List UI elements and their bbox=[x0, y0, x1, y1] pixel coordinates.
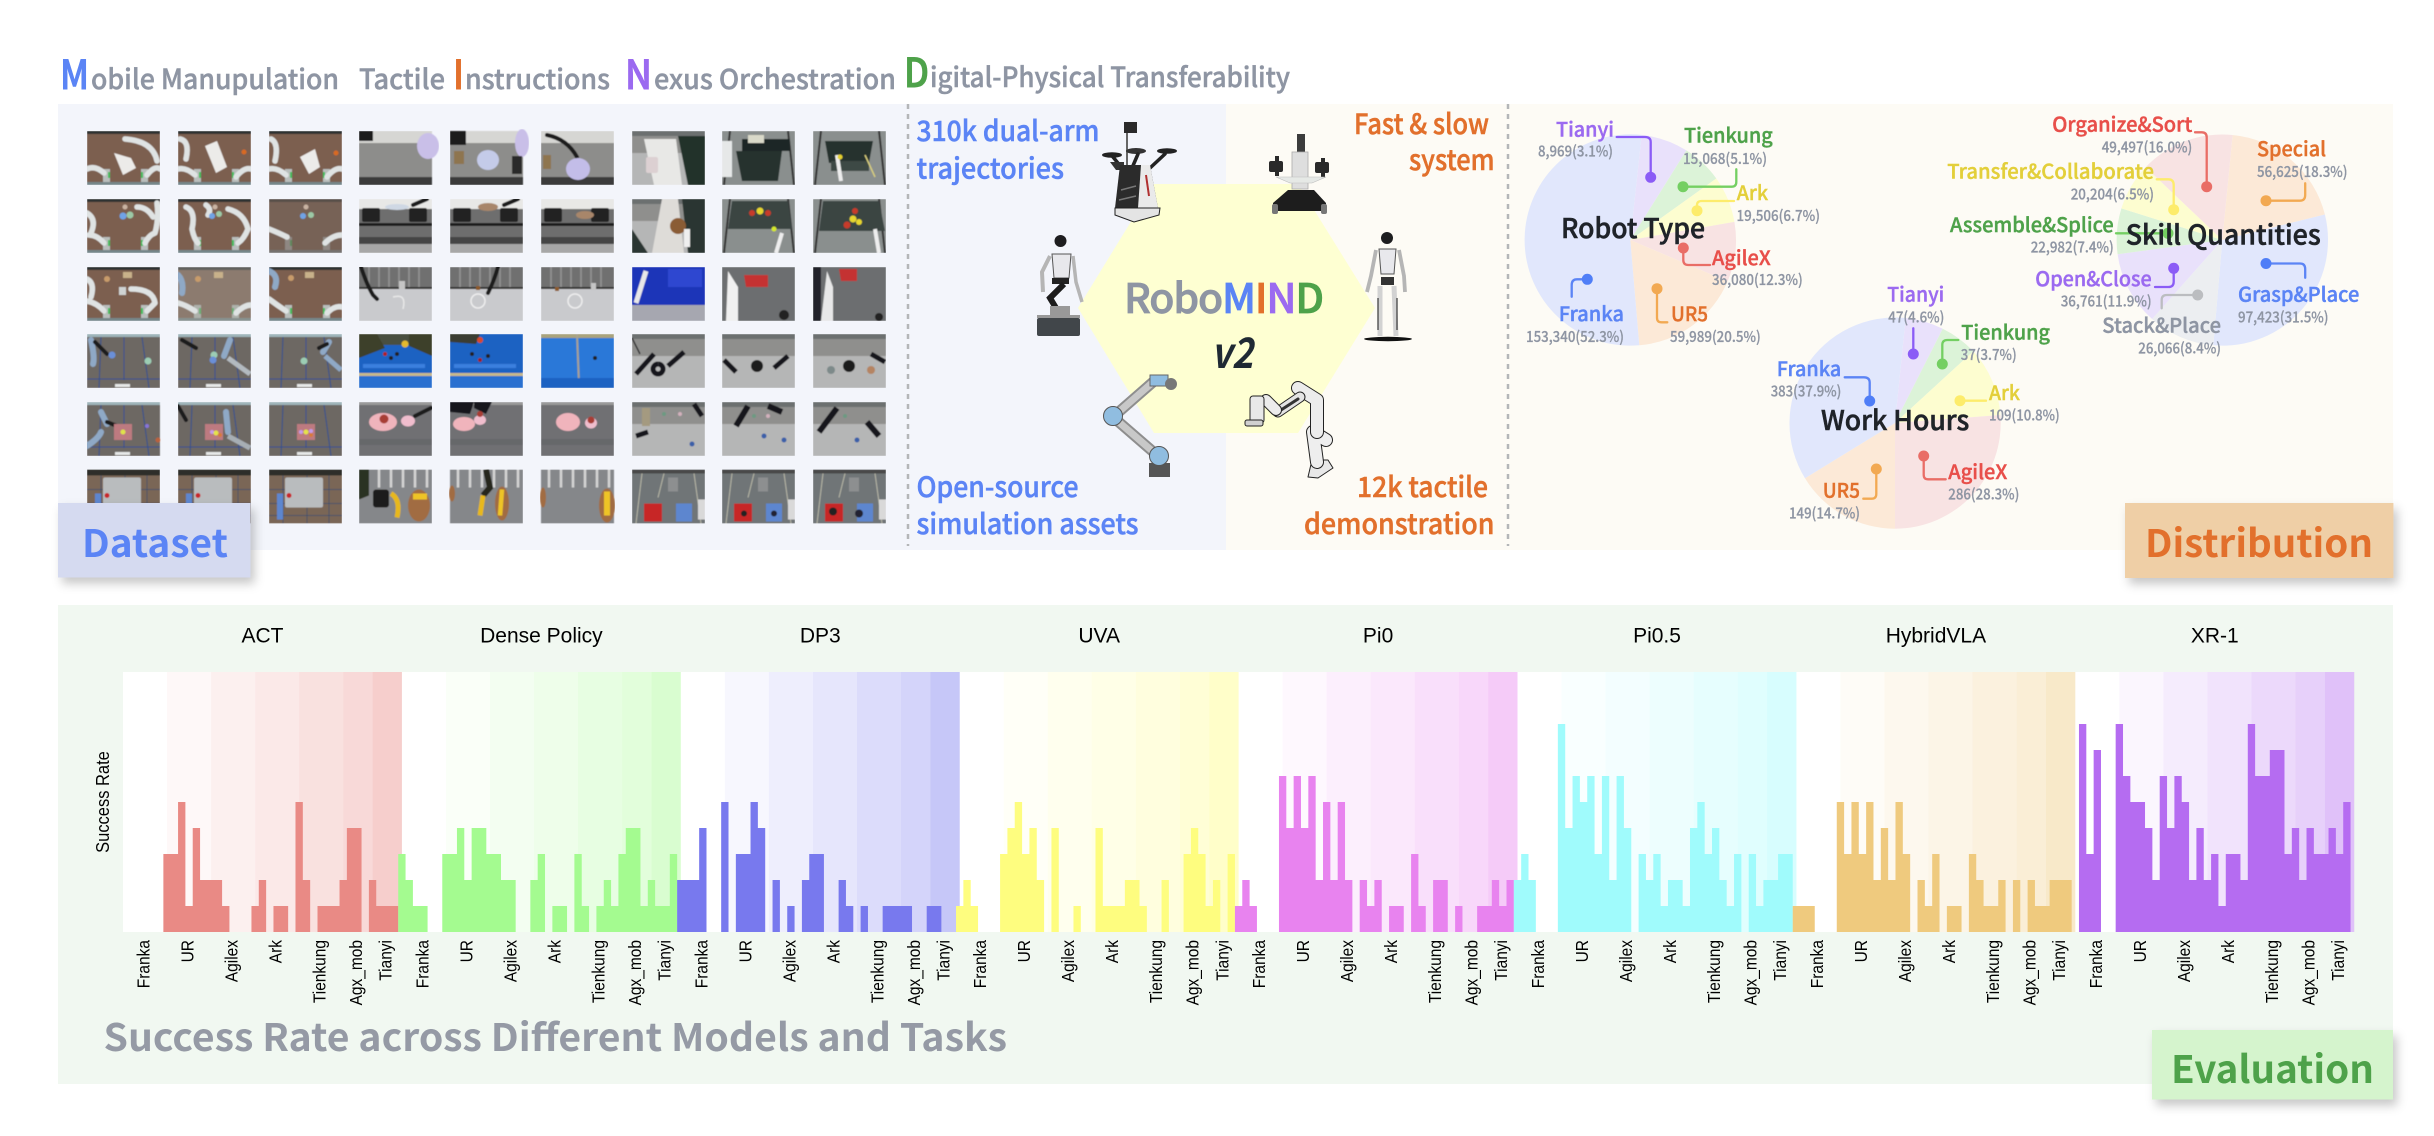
dataset thumbnail row 1 bbox=[87, 129, 886, 185]
model: HybridVLA bbox=[1793, 624, 2075, 1005]
RoboMIND v2 title: RoboMIND bbox=[1124, 265, 1324, 325]
model: Dense Policy: Dense Policy bbox=[480, 624, 603, 648]
label: Distribution: Distribution bbox=[2145, 513, 2373, 568]
pie chart: Robot Type bbox=[1525, 114, 1820, 347]
labels: Skill Quantities: Skill Quantities bbox=[2126, 213, 2321, 252]
model: Pi0.5: Agx_mob bbox=[1740, 940, 1761, 1005]
model: ACT: ACT bbox=[242, 624, 284, 648]
labels: Skill Quantities: Assemble&Splice bbox=[1950, 209, 2114, 238]
panel: evaluation background bbox=[58, 605, 2393, 1084]
side text: Fast & slow system: system bbox=[1409, 139, 1494, 179]
labels: Work Hours: 383(37.9%) bbox=[1771, 381, 1841, 402]
labels: Robot Type bbox=[1526, 114, 1820, 347]
dataset thumbnail row 4 bbox=[87, 334, 886, 388]
dataset thumbnail row 2 bbox=[87, 199, 886, 253]
model: HybridVLA: UR bbox=[1851, 940, 1871, 962]
model: DP3: DP3 bbox=[800, 624, 841, 648]
model: XR-1 bbox=[2079, 624, 2354, 1005]
icon: column mobile robot bbox=[1269, 134, 1329, 214]
page title line: exus Orchestration bbox=[654, 57, 896, 97]
page title line: D bbox=[904, 41, 929, 99]
model: Dense Policy: Tianyi bbox=[654, 940, 675, 981]
labels: Skill Quantities bbox=[1947, 109, 2359, 358]
dataset thumbnail row 6 bbox=[87, 470, 886, 524]
labels: Robot Type: 59,989(20.5%) bbox=[1670, 326, 1761, 347]
axis title: Success Rate: Success Rate bbox=[92, 751, 113, 853]
labels: Robot Type: Ark bbox=[1737, 177, 1769, 206]
labels: Work Hours: 37(3.7%) bbox=[1961, 344, 2017, 365]
icon: standing humanoid bbox=[1364, 232, 1412, 341]
labels: Skill Quantities: 49,497(16.0%) bbox=[2102, 137, 2192, 158]
labels: Skill Quantities: 56,625(18.3%) bbox=[2257, 161, 2348, 182]
model: HybridVLA: Ark bbox=[1939, 939, 1959, 963]
label: Distribution bbox=[2125, 503, 2393, 578]
model: ACT: Tianyi bbox=[376, 940, 396, 981]
labels: Skill Quantities: Open&Close bbox=[2035, 263, 2152, 292]
model: Pi0: Tienkung bbox=[1425, 940, 1445, 1003]
side text: Open-source simulation assets: simulation assets bbox=[916, 503, 1138, 543]
labels: Work Hours: 47(4.6%) bbox=[1888, 306, 1944, 327]
model: XR-1: Tienkung bbox=[2262, 940, 2282, 1003]
model: Dense Policy: Agx_mob bbox=[625, 940, 645, 1005]
page title line: Tactile bbox=[359, 57, 445, 97]
model: Dense Policy bbox=[398, 624, 681, 1005]
labels: Robot Type: 15,068(5.1%) bbox=[1683, 148, 1767, 169]
labels: Skill Quantities: 36,761(11.9%) bbox=[2061, 291, 2152, 312]
labels: Skill Quantities: Organize&Sort bbox=[2052, 109, 2192, 138]
side text: Fast & slow system: Fast & slow bbox=[1354, 103, 1489, 143]
model: Dense Policy: Franka bbox=[412, 939, 433, 988]
labels: Robot Type: Tienkung bbox=[1684, 120, 1773, 149]
labels: Skill Quantities: Special bbox=[2257, 133, 2326, 162]
model: ACT: Agilex bbox=[221, 939, 242, 982]
labels: Robot Type: UR5 bbox=[1671, 298, 1708, 327]
labels: Work Hours: Work Hours bbox=[1821, 399, 1969, 438]
model: XR-1: Agilex bbox=[2174, 939, 2194, 982]
model: UVA: Tienkung bbox=[1146, 940, 1166, 1003]
chart caption: Success Rate across Different Models and Tasks bbox=[104, 1007, 1007, 1062]
model: DP3: UR bbox=[735, 940, 756, 962]
model: UVA bbox=[956, 624, 1239, 1005]
model: Pi0: Ark bbox=[1381, 939, 1401, 963]
model: ACT: Agx_mob bbox=[346, 940, 366, 1005]
side text: 12k tactile demonstration: 12k tactile bbox=[1357, 466, 1488, 506]
connectors: Skill Quantities bbox=[2116, 132, 2305, 308]
model: ACT: Tienkung bbox=[309, 940, 330, 1003]
RoboMIND v2 title bbox=[1124, 265, 1324, 381]
pie chart: Work Hours bbox=[1771, 279, 2060, 529]
model: HybridVLA: Agilex bbox=[1895, 939, 1915, 982]
model: DP3: Agx_mob bbox=[904, 940, 924, 1005]
page title line: obile Manupulation bbox=[91, 57, 339, 97]
labels: Robot Type: Robot Type bbox=[1561, 207, 1705, 246]
model: HybridVLA: Franka bbox=[1807, 939, 1827, 988]
model: XR-1: UR bbox=[2130, 940, 2150, 962]
model: Pi0.5: Tianyi bbox=[1770, 940, 1790, 981]
model: Pi0.5: Ark bbox=[1660, 939, 1680, 963]
labels: Work Hours: 286(28.3%) bbox=[1948, 483, 2019, 504]
model: Pi0.5: UR bbox=[1572, 940, 1592, 962]
model: DP3: Tianyi bbox=[933, 940, 954, 981]
model: UVA: Agilex bbox=[1058, 939, 1078, 982]
icon: tower dual-arm robot bbox=[1102, 122, 1177, 222]
model: HybridVLA: Agx_mob bbox=[2019, 940, 2040, 1005]
labels: Robot Type: AgileX bbox=[1712, 242, 1771, 271]
model: XR-1: XR-1 bbox=[2191, 624, 2239, 648]
labels: Work Hours: Tianyi bbox=[1887, 279, 1944, 308]
model: Dense Policy: Ark bbox=[544, 939, 565, 963]
panel: distribution background bbox=[1226, 104, 2393, 550]
model: Pi0: Pi0 bbox=[1363, 624, 1393, 648]
model: Pi0.5: Agilex bbox=[1616, 939, 1636, 982]
labels: Robot Type: 36,080(12.3%) bbox=[1712, 269, 1803, 290]
labels: Skill Quantities: 97,423(31.5%) bbox=[2238, 307, 2328, 328]
model: ACT: UR bbox=[177, 940, 198, 962]
model: XR-1: Ark bbox=[2218, 939, 2238, 963]
model: DP3: Agilex bbox=[779, 939, 800, 982]
labels: Skill Quantities: Stack&Place bbox=[2102, 310, 2221, 339]
page title line: igital-Physical Transferability bbox=[930, 55, 1290, 95]
labels: Skill Quantities: 20,204(6.5%) bbox=[2071, 183, 2154, 204]
model: Pi0: Agx_mob bbox=[1462, 940, 1482, 1005]
labels: Work Hours: Franka bbox=[1777, 353, 1841, 382]
labels: Work Hours: Tienkung bbox=[1961, 316, 2050, 345]
side text: 310k dual-arm trajectories: 310k dual-arm bbox=[916, 110, 1100, 150]
model: HybridVLA: Tianyi bbox=[2049, 940, 2069, 981]
model: Pi0.5: Tienkung bbox=[1704, 940, 1724, 1003]
label: Evaluation bbox=[2152, 1030, 2393, 1100]
page title line bbox=[60, 41, 1290, 101]
label: Evaluation: Evaluation bbox=[2171, 1039, 2374, 1094]
labels: Robot Type: 153,340(52.3%) bbox=[1526, 326, 1624, 347]
model: XR-1: Franka bbox=[2086, 939, 2106, 988]
side text: Open-source simulation assets: Open-source bbox=[916, 466, 1078, 506]
model: Dense Policy: UR bbox=[456, 940, 477, 962]
model: UVA: Franka bbox=[970, 939, 990, 988]
model: Pi0: UR bbox=[1293, 940, 1313, 962]
model: Dense Policy: Agilex bbox=[500, 939, 521, 982]
model: UVA: Agx_mob bbox=[1183, 940, 1203, 1005]
labels: Skill Quantities: 26,066(8.4%) bbox=[2138, 337, 2221, 358]
model: Pi0.5: Franka bbox=[1528, 939, 1548, 988]
panel: dataset background bbox=[58, 104, 1226, 550]
icon: white collaborative arm bbox=[1245, 388, 1333, 478]
model: ACT: Ark bbox=[265, 939, 286, 963]
connectors: Robot Type bbox=[1572, 137, 1736, 322]
label: Dataset: Dataset bbox=[82, 513, 228, 568]
model: XR-1: Agx_mob bbox=[2298, 940, 2319, 1005]
labels: Robot Type: Franka bbox=[1559, 298, 1624, 327]
model: UVA: Ark bbox=[1102, 939, 1122, 963]
model: UVA: UVA bbox=[1078, 624, 1120, 648]
model: Pi0: Agilex bbox=[1337, 939, 1357, 982]
labels: Robot Type: 8,969(3.1%) bbox=[1538, 141, 1613, 162]
model: Pi0 bbox=[1235, 624, 1518, 1005]
labels: Skill Quantities: 22,982(7.4%) bbox=[2031, 237, 2114, 258]
model: HybridVLA: Tienkung bbox=[1983, 940, 2003, 1003]
labels: Work Hours: AgileX bbox=[1948, 456, 2007, 485]
hexagon centre bbox=[1078, 184, 1375, 433]
labels: Robot Type: Tianyi bbox=[1556, 114, 1614, 143]
icon: UR robot arm bbox=[1104, 375, 1177, 477]
labels: Skill Quantities: Grasp&Place bbox=[2238, 279, 2359, 308]
labels: Work Hours: 109(10.8%) bbox=[1989, 405, 2060, 426]
model: HybridVLA: HybridVLA bbox=[1886, 624, 1986, 648]
labels: Skill Quantities: Transfer&Collaborate bbox=[1947, 155, 2154, 184]
chart plot background bbox=[123, 672, 2354, 932]
model: Dense Policy: Tienkung bbox=[588, 940, 609, 1003]
model: Pi0: Tianyi bbox=[1491, 940, 1511, 981]
page title line: I bbox=[453, 43, 464, 101]
pie chart: Skill Quantities bbox=[1947, 109, 2359, 358]
page title line: M bbox=[60, 43, 89, 101]
model: XR-1: Tianyi bbox=[2328, 940, 2348, 981]
model: Pi0: Franka bbox=[1249, 939, 1269, 988]
side text: 310k dual-arm trajectories: trajectories bbox=[916, 148, 1064, 188]
side text: 12k tactile demonstration: demonstration bbox=[1304, 503, 1494, 543]
labels: Work Hours: Ark bbox=[1989, 377, 2020, 406]
RoboMIND v2 title: v2 bbox=[1211, 320, 1256, 381]
model: Pi0.5 bbox=[1514, 624, 1796, 1005]
page title line: nstructions bbox=[465, 57, 610, 97]
model: DP3: Tienkung bbox=[867, 940, 888, 1003]
labels: Robot Type: 19,506(6.7%) bbox=[1736, 205, 1820, 226]
model: Pi0.5: Pi0.5 bbox=[1633, 624, 1681, 648]
connectors: Work Hours bbox=[1845, 328, 1986, 499]
dataset thumbnail row 5 bbox=[87, 402, 886, 456]
model: DP3: Ark bbox=[823, 939, 844, 963]
labels: Work Hours: 149(14.7%) bbox=[1789, 503, 1860, 524]
labels: Work Hours bbox=[1771, 279, 2060, 524]
page title line: N bbox=[625, 43, 652, 101]
model: DP3: Franka bbox=[691, 939, 712, 988]
model: ACT: Franka bbox=[133, 939, 154, 988]
label: Dataset bbox=[58, 503, 250, 578]
model: UVA: UR bbox=[1014, 940, 1034, 962]
icon: humanoid on mobile base bbox=[1037, 235, 1082, 336]
model: ACT bbox=[133, 624, 402, 1005]
model: UVA: Tianyi bbox=[1212, 940, 1233, 981]
labels: Work Hours: UR5 bbox=[1823, 475, 1860, 504]
dataset thumbnail row 3 bbox=[87, 267, 886, 321]
model: DP3 bbox=[677, 624, 960, 1005]
